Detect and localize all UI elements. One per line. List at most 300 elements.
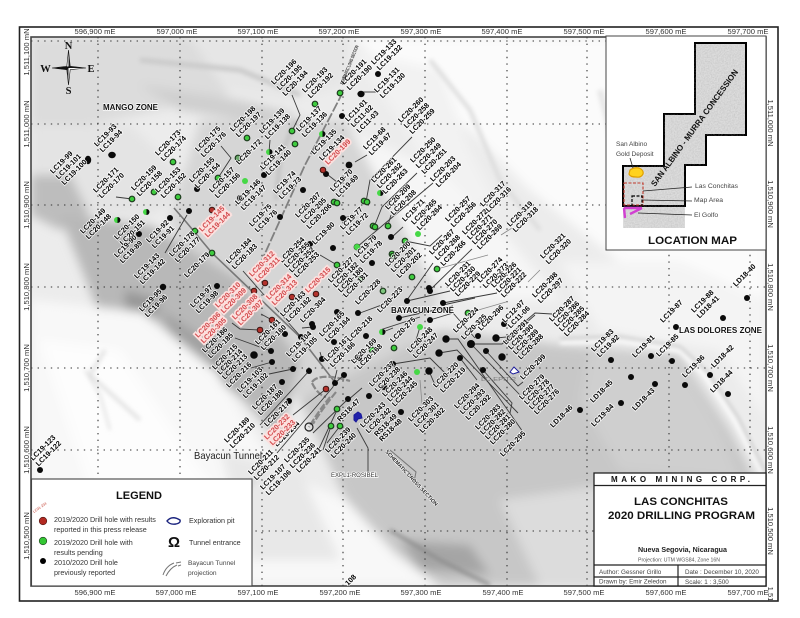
credits xyxy=(599,569,759,586)
panel: location map xyxy=(606,36,766,250)
zone name: Mango: MANGO ZONE xyxy=(103,103,159,112)
red highlighted drill hole labels: LC20-313 xyxy=(270,278,299,307)
drill hole labels: west and north: LC19-140 xyxy=(264,148,293,177)
top axis labels: 596,900 mE xyxy=(75,27,115,36)
red hole key: reported in this press release xyxy=(54,525,147,534)
project location: Nueva Segovia, Nicaragua xyxy=(638,545,728,554)
drill hole labels: south central: LC20-214 xyxy=(215,346,245,376)
bottom axis labels: 597,700 mE xyxy=(728,588,768,597)
drill hole labels: north central: LC20-268 xyxy=(433,233,462,262)
drill hole labels: west and north: LC19-122 xyxy=(34,439,63,468)
schematic long section label: SCHEMATIC LONG SECTION xyxy=(339,44,361,86)
drill hole labels: Bayacun zone: LC20-282 xyxy=(478,407,507,436)
red highlighted drill hole labels: LC20-309 xyxy=(219,286,248,315)
drill hole labels: west and north: LC19-94 xyxy=(98,127,125,154)
drill hole labels: Bayacun zone: LC20-246 xyxy=(380,369,409,398)
drill hole labels: west and north: LC19-74 xyxy=(271,168,298,195)
compass letters: E xyxy=(87,64,95,75)
exploration pits xyxy=(354,367,519,422)
red highlighted drill hole labels: LC20-307 xyxy=(236,298,265,327)
red highlighted drill hole labels: LC19-145 xyxy=(197,204,226,233)
drill hole labels: Las Dolores zone: LD18-41 xyxy=(695,294,721,320)
left axis labels: 1,510,800 mN xyxy=(22,263,31,311)
project title xyxy=(608,496,755,522)
drill hole labels: north central: LC20-318 xyxy=(511,205,540,234)
drill hole labels: Bayacun zone: LC20-220 xyxy=(431,360,460,389)
drill hole labels: south central: LC20-239 xyxy=(323,425,352,454)
red highlighted drill hole labels: LC20-308 xyxy=(230,292,259,321)
top axis labels: 597,100 mE xyxy=(238,27,278,36)
green hole key xyxy=(39,537,133,557)
drill hole labels: north central: LC11-01 xyxy=(343,97,369,123)
top axis labels: 597,500 mE xyxy=(564,27,604,36)
tunnel entrance key xyxy=(168,534,241,551)
locator labels: El Golfo xyxy=(694,212,718,219)
drill hole labels: west and north: LC20-174 xyxy=(159,133,189,163)
drill hole labels: north central: LC20-261 xyxy=(369,155,398,184)
drill hole labels: Bayacun zone: LC20-286 xyxy=(552,299,581,328)
compass letters xyxy=(40,41,95,97)
drill hole labels: west and north: LC19-136 xyxy=(300,110,329,139)
drill hole labels: south central: LC19-104 xyxy=(284,328,314,358)
green hole key: results pending xyxy=(54,548,103,557)
drill hole labels: Bayacun zone: LC20-284 xyxy=(562,308,592,338)
red highlighted drill hole labels: LC19-144 xyxy=(203,209,233,239)
drill hole labels: south central: LC20-167 xyxy=(322,334,351,363)
concession texture xyxy=(624,44,745,228)
drill hole labels: west and north: LC20-153 xyxy=(153,165,182,194)
drill hole labels: Bayacun zone: LC20-200 xyxy=(383,239,412,268)
drill hole labels: north central: LC20-317 xyxy=(478,179,507,208)
drill hole labels: south central: LC20-168 xyxy=(355,342,384,371)
drill hole labels: north central: LC20-209 xyxy=(383,182,412,211)
locator leaders xyxy=(638,187,692,215)
panel: legend xyxy=(32,479,252,586)
section and tunnel lines xyxy=(174,92,416,482)
credits: Scale: 1 : 3,500 xyxy=(685,579,729,586)
left axis labels: 1,511,000 mN xyxy=(22,100,31,148)
left axis labels: 1,510,600 mN xyxy=(22,426,31,474)
drill hole labels: Bayacun zone: LC20-289 xyxy=(511,327,540,356)
black drill holes previously reported xyxy=(37,71,750,473)
drill hole labels: Las Dolores zone: LD18-45 xyxy=(588,378,614,404)
drill hole labels: west and north: LC19-76 xyxy=(253,208,279,234)
tunnel entrance key: Ω xyxy=(168,534,180,551)
tunnel projection key: projection xyxy=(188,570,217,577)
drill hole labels: south central: LC20-186 xyxy=(200,325,229,354)
top axis labels: 597,400 mE xyxy=(482,27,522,36)
drill hole labels: west and north: LC20-198 xyxy=(228,104,257,133)
drill hole labels: south central: LC20-164 xyxy=(323,314,353,344)
drill hole labels: south central: LC20-188 xyxy=(256,388,285,417)
drill hole labels: Bayacun zone: LC20-279 xyxy=(517,372,546,401)
tunnel entrance key: Tunnel entrance xyxy=(189,538,241,547)
legend heading: LEGEND xyxy=(116,490,162,502)
drill hole labels: Bayacun zone: LC20-229 xyxy=(453,269,482,298)
drill hole labels: Bayacun zone: LC11-06 xyxy=(506,304,532,330)
drill hole labels: Las Dolores zone: LC19-85 xyxy=(654,332,680,358)
locator labels: Map Area xyxy=(694,197,723,204)
drill hole labels: south central: LC20-184 xyxy=(224,235,254,265)
drill hole labels: south central: LC20-183 xyxy=(230,242,259,271)
drill hole labels: west and north: LC19-75 xyxy=(247,202,273,228)
black hole key: 2010/2020 Drill hole xyxy=(54,558,118,567)
drill hole labels: south central: LC20-161 xyxy=(253,317,282,346)
drill hole labels: south central: LC19-105 xyxy=(290,335,319,364)
panel: title block xyxy=(594,473,766,586)
bottom axis labels: 597,200 mE xyxy=(320,588,360,597)
credits: Drawn by: Emir Zeledon xyxy=(599,578,667,586)
drill hole labels: Bayacun zone: LC20-202 xyxy=(394,250,424,280)
drill hole labels: north central: LC20-249 xyxy=(414,141,443,170)
drill hole labels: west and north: LC20-195 xyxy=(275,63,304,92)
green drill holes results pending xyxy=(129,90,471,429)
drill hole labels: west and north: LC19-95 xyxy=(137,287,163,313)
tunnel projection key xyxy=(163,560,236,577)
drill hole labels: north central: LC20-265 xyxy=(409,197,438,226)
drill hole labels: south central: LC20-216 xyxy=(224,360,253,389)
project title: 2020 DRILLING PROGRAM xyxy=(608,510,755,522)
drill hole labels: Bayacun zone: LC20-276 xyxy=(532,387,561,416)
drill hole labels: south central: 108 xyxy=(343,572,358,587)
drill hole labels: Bayacun zone: LC20-287 xyxy=(547,294,576,323)
drill hole labels: north central: LC19-135 xyxy=(309,127,338,156)
right axis labels: 1,510,800 mN xyxy=(766,263,775,311)
drill hole labels: north central: LC20-208 xyxy=(389,188,418,217)
drill hole labels: south central: LC20-243 xyxy=(358,400,387,429)
drill hole labels: west and north: LC20-150 xyxy=(112,212,141,241)
drill hole labels: south central: LC20-241 xyxy=(294,445,323,474)
drill hole labels: west and north: LC20-148 xyxy=(84,212,113,241)
exploration pit label: EXPL1-ROSIBEL xyxy=(331,472,378,479)
red drill holes reported in this release xyxy=(209,167,329,392)
locator labels xyxy=(694,183,739,219)
drill hole labels: west and north: LC19-89 xyxy=(118,239,144,265)
drill hole labels: Las Dolores zone: LC19-84 xyxy=(589,401,616,428)
drill hole labels: north central: LC19-130 xyxy=(378,71,407,100)
company name: MAKO MINING CORP. xyxy=(611,475,750,484)
drill hole labels: Bayacun zone: LC20-294 xyxy=(452,380,482,410)
drill hole labels: south central: LC20-210 xyxy=(228,421,257,450)
drill hole labels: north central: LC19-70 xyxy=(328,167,354,193)
drill hole labels: north central: LC20-271 xyxy=(465,212,494,241)
drill hole labels: north central: LC20-267 xyxy=(427,227,456,256)
drill hole labels: Bayacun zone: LC20-325 xyxy=(459,312,488,341)
drill hole labels: west and north: LC20-177 xyxy=(173,235,202,264)
drill hole labels: south central: LC19-103 xyxy=(235,365,264,394)
drill hole labels: north central: LC19-71 xyxy=(400,197,426,223)
drill hole labels: south central: LC20-189 xyxy=(222,415,251,444)
drill hole labels: Bayacun zone: RS18-49 xyxy=(372,412,399,438)
drill hole labels: Bayacun zone: LC20-292 xyxy=(463,392,493,422)
compass star xyxy=(52,50,86,85)
Bayacun Tunnel label: Bayacun Tunnel xyxy=(194,450,262,462)
drill hole labels: Bayacun zone: LC20-290 xyxy=(506,322,535,351)
drill hole labels: west and north: LC19-141 xyxy=(258,142,287,171)
drill hole labels: Bayacun zone: LC20-293 xyxy=(458,387,487,416)
sample red label: LC01-234 xyxy=(32,501,48,514)
drill hole labels: north central: LC20-250 xyxy=(408,135,437,164)
pit key: Exploration pit xyxy=(189,516,235,525)
bottom axis labels: 597,100 mE xyxy=(238,588,278,597)
bottom axis labels: 597,400 mE xyxy=(483,588,523,597)
drill hole labels: west and north: LC19-139 xyxy=(257,106,286,135)
bottom axis labels: 597,000 mE xyxy=(156,588,196,597)
zone name: Bayacun: BAYACUN ZONE xyxy=(391,306,455,315)
drill hole labels: west and north: LC20-159 xyxy=(129,163,158,192)
drill hole labels: Bayacun zone: LC20-201 xyxy=(389,245,418,274)
drill hole labels: west and north: LC19-96 xyxy=(143,293,169,319)
drill hole labels: west and north: LC20-175 xyxy=(193,124,222,153)
drill hole labels: west and north: LC20-205 xyxy=(299,196,328,225)
drill hole labels: Las Dolores zone: LD18-42 xyxy=(709,343,735,369)
right axis labels: 1,510,700 mN xyxy=(766,344,775,392)
right axis labels: 1,510,600 mN xyxy=(766,426,775,474)
top axis labels: 597,000 mE xyxy=(157,27,197,36)
drill hole labels: west and north: LC20-194 xyxy=(280,68,310,98)
right axis labels: 1,510,900 mN xyxy=(766,180,775,228)
drill hole labels: west and north: LC20-158 xyxy=(135,169,164,198)
drill hole labels: Bayacun zone: LC20-297 xyxy=(536,276,565,305)
right axis labels: 1,510,500 mN xyxy=(766,507,775,555)
leader lines xyxy=(116,92,552,472)
drill hole labels: south central: LC20-242 xyxy=(364,406,393,435)
drill hole labels: south central: LC19-102 xyxy=(241,371,270,400)
drill hole labels: west and north: LC20-171 xyxy=(91,165,120,194)
drill hole labels: west and north: LC19-97 xyxy=(188,283,214,309)
tunnel projection key: Bayacun Tunnel xyxy=(188,560,236,567)
drill hole labels: west and north: LC19-143 xyxy=(132,251,161,280)
drill hole labels: north central: LC20-191 xyxy=(339,57,368,86)
San Albino deposit: Gold Deposit xyxy=(616,151,654,158)
drill hole labels: Las Dolores zone: LC19-86 xyxy=(680,353,706,379)
drill hole labels: north central: LC20-204 xyxy=(434,159,464,189)
drill hole labels: Bayacun zone: LC20-296 xyxy=(476,303,505,332)
top axis labels: 597,300 mE xyxy=(401,27,441,36)
drill hole labels: south central: LC19-106 xyxy=(264,468,293,497)
drill hole labels: north central: LC20-257 xyxy=(443,194,472,223)
drill hole labels: Bayacun zone: LC20-224 xyxy=(451,304,481,334)
red highlighted drill hole labels: LC20-311 xyxy=(253,255,282,284)
red highlighted drill hole labels: LC20-312 xyxy=(247,249,276,278)
drill hole labels: Bayacun zone: LC20-237 xyxy=(367,359,396,388)
bottom axis labels: 596,900 mE xyxy=(75,588,115,597)
right axis labels: 1,511,000 mN xyxy=(766,99,775,147)
drill hole labels: north central: LC20-270 xyxy=(470,217,499,246)
area below concession xyxy=(623,206,685,228)
compass letters: S xyxy=(66,86,72,97)
left axis labels xyxy=(22,28,31,560)
drill hole labels: north central: LC20-269 xyxy=(475,222,504,251)
drill hole labels: Bayacun zone: LC20-221 xyxy=(494,265,523,294)
San Albino deposit xyxy=(616,141,654,177)
drill hole labels: south central: LC20-215 xyxy=(210,342,239,371)
drill hole labels: Las Dolores zone: LC19-83 xyxy=(589,327,615,353)
compass letters: N xyxy=(65,41,73,52)
schematic cross section label: SCHEMATIC CROSS SECTION xyxy=(384,449,439,508)
red hole key: 2019/2020 Drill hole with results xyxy=(54,515,156,524)
drill hole labels: north central: LC19-134 xyxy=(317,132,347,162)
drill hole labels: north central: LC20-266 xyxy=(438,238,468,268)
drill hole labels: Bayacun zone: LC20-278 xyxy=(522,377,551,406)
drill hole labels: Las Dolores zone: LC19-82 xyxy=(595,333,621,359)
red highlighted drill hole labels: LC20-199 xyxy=(323,137,352,166)
drill hole labels: west and north: LC20-178 xyxy=(167,229,196,258)
drill hole labels: south central: LC20-180 xyxy=(336,265,365,294)
drill hole labels: west and north: LC20-176 xyxy=(199,130,228,159)
drill hole labels: west and north: LC19-147 xyxy=(239,183,268,212)
drill hole labels: west and north: LC20-156 xyxy=(213,171,242,200)
drill hole labels: south central: LC20-235 xyxy=(282,435,311,464)
drill hole labels: north central: LC19-72 xyxy=(344,211,370,237)
drill hole labels: west and north: LC19-92 xyxy=(144,218,170,244)
drill hole labels: south central: LC20-212 xyxy=(252,453,281,482)
credits: Date : December 10, 2020 xyxy=(685,569,759,576)
drill hole labels: west and north: LC19-98 xyxy=(194,289,220,315)
left axis labels: 1,510,700 mN xyxy=(22,344,31,392)
drill hole labels: Bayacun zone: LC20-223 xyxy=(375,285,404,314)
drill hole labels: west and north: LC20-173 xyxy=(153,128,182,157)
drill hole labels: west and north: LC19-93 xyxy=(92,122,118,148)
drill hole labels: Las Dolores zone: LD18-43 xyxy=(630,386,656,412)
drill hole labels: west and north: LC20-179 xyxy=(182,250,211,279)
drill hole labels: Bayacun zone: RS18-48 xyxy=(377,417,404,443)
drill hole labels: south central: LC20-165 xyxy=(317,309,346,338)
bottom axis labels xyxy=(75,588,768,597)
drill hole labels: south central: LC20-304 xyxy=(298,294,328,324)
bottom axis labels: 597,600 mE xyxy=(646,588,686,597)
red highlighted drill hole labels: LC20-233 xyxy=(268,418,297,447)
drill hole labels: north central: LC20-321 xyxy=(538,231,567,260)
San Albino deposit: San Albino xyxy=(616,141,647,148)
drill hole labels: west and north: LC20-157 xyxy=(207,165,236,194)
left axis labels: 1,510,500 mN xyxy=(22,512,31,560)
red highlighted drill hole labels: LC20-232 xyxy=(262,412,291,441)
drill hole labels: north central: LC20-260 xyxy=(396,95,425,124)
red highlighted drill hole labels: LC20-305 xyxy=(199,316,228,345)
drill hole labels: Bayacun zone: LC20-283 xyxy=(473,402,502,431)
drill hole labels: north central: LC19-79 xyxy=(352,233,378,259)
drill hole labels: north central: LC20-320 xyxy=(544,237,573,266)
red highlighted drill hole labels: LC20-315 xyxy=(303,265,332,294)
drill hole labels: north central: LC20-262 xyxy=(375,161,404,190)
location map heading: LOCATION MAP xyxy=(648,235,737,247)
drill hole labels: west and north: LC19-142 xyxy=(138,257,167,286)
drill hole labels: south central: LC20-169 xyxy=(349,336,378,365)
drill hole labels: south central: LC20-187 xyxy=(250,382,279,411)
drill hole labels: south central: RS18-47 xyxy=(335,397,362,423)
drill hole labels: Bayacun zone: LC20-245 xyxy=(390,379,419,408)
drill hole labels: north central: LC19-69 xyxy=(334,173,360,199)
drill hole labels: south central xyxy=(200,234,393,587)
drill hole labels: south central: LC20-162 xyxy=(284,295,313,324)
drill hole labels: west and north: LC19-146 xyxy=(233,177,262,206)
drill hole labels: west and north: LC20-197 xyxy=(234,110,263,139)
drill hole labels: Las Dolores zone: LC19-88 xyxy=(689,288,715,314)
drill hole labels: south central: LC20-253 xyxy=(292,250,321,279)
drill hole labels: south central: LC20-166 xyxy=(328,340,357,369)
drill hole labels: south central: LC20-185 xyxy=(206,331,235,360)
left axis labels: 1,511,100 mN xyxy=(22,28,31,76)
drill hole labels: north central: LC20-272 xyxy=(460,207,489,236)
project title: LAS CONCHITAS xyxy=(634,496,728,508)
top axis labels: 597,700 mE xyxy=(728,27,768,36)
drill hole labels: Las Dolores zone: LD18-44 xyxy=(708,367,735,394)
drill hole labels: Bayacun zone: LC20-298 xyxy=(530,270,559,299)
drill hole labels: west and north: LC20-192 xyxy=(306,71,335,100)
drill hole labels: Bayacun zone: LC12-07 xyxy=(500,298,526,324)
drill hole labels: Las Dolores zone: LC19-81 xyxy=(630,333,656,359)
drill hole labels: west and north: LC20-154 xyxy=(193,160,223,190)
pit key xyxy=(167,516,235,525)
drill hole labels: south central: LC20-217 xyxy=(262,399,291,428)
bottom axis labels: 597,500 mE xyxy=(564,588,604,597)
top axis labels xyxy=(75,27,768,36)
drill hole labels: west and north: LC20-207 xyxy=(293,190,322,219)
right axis labels xyxy=(766,99,775,601)
drill hole labels: Bayacun zone: LC20-226 xyxy=(489,260,518,289)
drill hole labels: south central: LC20-182 xyxy=(331,260,360,289)
credits: Author: Gessner Grillo xyxy=(599,569,662,576)
drill hole labels: Las Dolores zone: LD18-40 xyxy=(731,262,757,288)
drill hole labels: west and north: LC19-91 xyxy=(150,224,176,250)
red highlighted drill hole labels: LC20-306 xyxy=(193,310,222,339)
drill hole labels: west and north: LC19-90 xyxy=(112,233,138,259)
drill hole labels: north central: LC20-319 xyxy=(505,199,534,228)
drill hole labels: Bayacun zone: LC20-244 xyxy=(385,373,415,403)
drill hole labels: west and north: LC19-100 xyxy=(59,157,89,187)
drill hole labels: south central: LC20-211 xyxy=(246,447,275,476)
drill hole labels: Bayacun zone: LC20-219 xyxy=(438,365,467,394)
drill hole labels: west and north: LC20-155 xyxy=(187,155,216,184)
drill hole labels: Las Dolores zone: LC19-87 xyxy=(658,298,684,324)
drill hole labels: west and north: LC20-170 xyxy=(97,171,126,200)
drill hole labels: south central: LC20-255 xyxy=(282,240,311,269)
green hole key: 2019/2020 Drill hole with xyxy=(54,538,133,547)
drill hole labels: Bayacun zone xyxy=(367,239,592,458)
drill hole labels: Bayacun zone: LC20-231 xyxy=(443,259,472,288)
drill hole labels: west and north: LC19-101 xyxy=(54,152,83,181)
drill hole labels: west and north xyxy=(28,56,335,468)
bottom axis labels: 597,300 mE xyxy=(401,588,441,597)
concession name: SAN ALBINO - MURRA CONCESSION xyxy=(649,68,740,188)
drill hole labels: west and north: LC20-193 xyxy=(300,65,329,94)
concession polygon xyxy=(623,43,746,206)
drill hole labels: south central: LC20-227 xyxy=(326,255,355,284)
locator labels: Las Conchitas xyxy=(695,183,739,190)
drill hole labels: south central: LC20-252 xyxy=(287,245,316,274)
El Golfo area xyxy=(624,208,642,218)
drill hole labels: south central: LC20-218 xyxy=(345,314,374,343)
drill hole labels: west and north: LC20-206 xyxy=(304,201,334,231)
drill hole labels: Bayacun zone: LC20-247 xyxy=(411,331,440,360)
drill hole labels: north central: LC19-132 xyxy=(375,43,404,72)
drill hole labels: north central: LC20-316 xyxy=(484,185,513,214)
drill hole labels: south central: LC20-228 xyxy=(353,277,382,306)
drill hole labels: west and north: LC19-138 xyxy=(263,112,292,141)
drill hole labels: north central: LC20-263 xyxy=(380,166,410,196)
drill hole labels: south central: LC20-181 xyxy=(341,270,370,299)
drill hole labels: south central: LC20-254 xyxy=(277,234,307,264)
black hole key xyxy=(40,558,118,577)
drill hole labels: west and north: LC19-137 xyxy=(294,104,323,133)
drill hole labels: north central: LC11-02 xyxy=(349,103,375,129)
drill hole labels: north central: LC20-258 xyxy=(402,101,431,130)
drill hole labels: south central: LC20-234 xyxy=(272,418,302,448)
drill hole labels: Bayacun zone: LD18-46 xyxy=(548,403,574,429)
drill hole labels: Bayacun zone: LC20-274 xyxy=(475,254,505,284)
drill hole labels: south central: LC19-107 xyxy=(258,462,287,491)
